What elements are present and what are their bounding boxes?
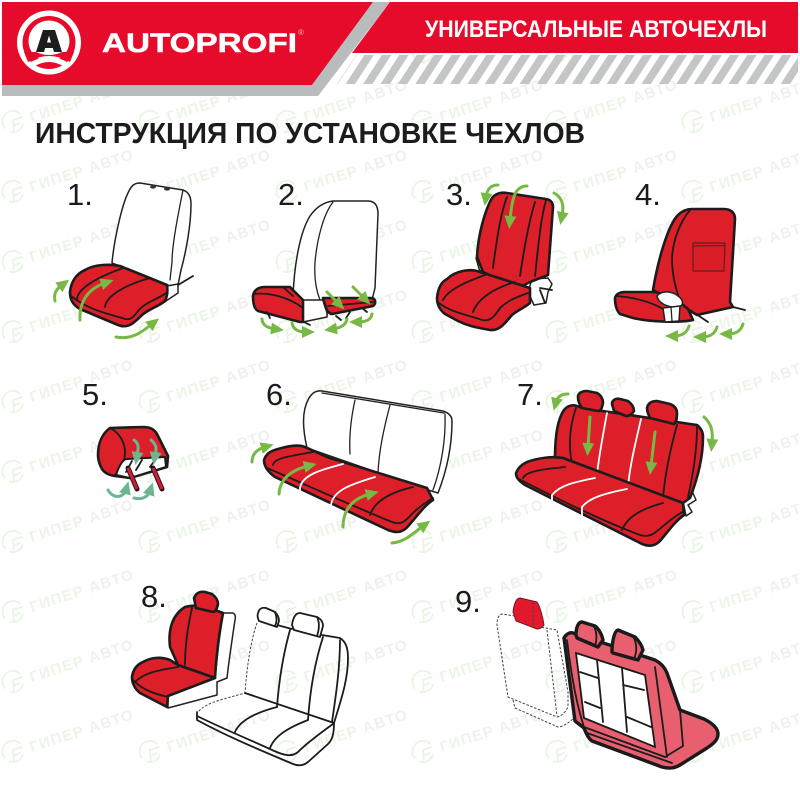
background watermarks: ГИПЕР АВТО [165, 6, 273, 56]
headrest opening [116, 457, 166, 478]
background watermarks: ГИПЕР АВТО [165, 356, 273, 406]
registered mark: ® [298, 28, 304, 37]
headrest [98, 427, 168, 478]
red front strip [323, 298, 375, 314]
white cushion stitching [552, 478, 595, 503]
step 6 [252, 377, 452, 543]
step number 8: 8. [141, 579, 167, 614]
step number 9: 9. [455, 584, 481, 619]
pink seat frame [564, 633, 718, 768]
step number 5: 5. [82, 377, 108, 412]
background watermarks: ГИПЕР АВТО [572, 216, 680, 266]
background watermarks: ГИПЕР АВТО [28, 566, 136, 616]
background watermarks: ГИПЕР АВТО [438, 706, 546, 756]
background watermarks: ГИПЕР АВТО [572, 426, 680, 476]
headrests [578, 391, 677, 424]
background watermarks: ГИПЕР АВТО [302, 566, 410, 616]
solid bench [197, 693, 334, 765]
centre headrest [612, 399, 634, 416]
arrows step 7 [588, 417, 590, 447]
step 5 [82, 377, 168, 499]
background watermarks: ГИПЕР АВТО [438, 216, 546, 266]
background watermarks: ГИПЕР АВТО [438, 76, 546, 126]
logo emblem [17, 10, 81, 74]
background watermarks: ГИПЕР АВТО [28, 356, 136, 406]
seat back pocket [693, 243, 725, 271]
step 9 [455, 584, 718, 768]
header banner [2, 2, 798, 96]
background watermarks: ГИПЕР АВТО [438, 636, 546, 686]
white brackets [657, 292, 682, 307]
bench right headrest [292, 613, 323, 637]
step number 2: 2. [278, 177, 304, 212]
step 7 [516, 377, 712, 546]
right headrest [647, 401, 677, 424]
background watermarks: ГИПЕР АВТО [165, 496, 273, 546]
left headrest [578, 391, 603, 411]
white side brackets [528, 278, 552, 305]
header tagline: УНИВЕРСАЛЬНЫЕ АВТОЧЕХЛЫ [425, 16, 767, 43]
background watermarks: ГИПЕР АВТО [28, 76, 136, 126]
background watermarks: ГИПЕР АВТО [165, 426, 273, 476]
headrest rods [128, 468, 137, 489]
background watermarks: ГИПЕР АВТО [572, 566, 680, 616]
background watermarks: ГИПЕР АВТО [572, 286, 680, 336]
background watermarks: ГИПЕР АВТО [28, 496, 136, 546]
background watermarks: ГИПЕР АВТО [438, 356, 546, 406]
header stripes [337, 55, 798, 84]
background watermarks: ГИПЕР АВТО [302, 496, 410, 546]
step number 3: 3. [446, 177, 472, 212]
background watermarks: ГИПЕР АВТО [302, 146, 410, 196]
white back stitching [597, 413, 607, 475]
red headrest [513, 598, 544, 629]
background watermarks: ГИПЕР АВТО [165, 286, 273, 336]
background watermarks: ГИПЕР АВТО [165, 706, 273, 756]
background watermarks: ГИПЕР АВТО [572, 706, 680, 756]
background watermarks: ГИПЕР АВТО [165, 216, 273, 266]
background watermarks: ГИПЕР АВТО [438, 496, 546, 546]
red seat cushion [615, 292, 693, 322]
background watermarks: ГИПЕР АВТО [302, 76, 410, 126]
bench left headrest [258, 608, 279, 627]
white bench back [304, 391, 452, 493]
background watermarks: ГИПЕР АВТО [165, 636, 273, 686]
background watermarks: ГИПЕР АВТО [28, 706, 136, 756]
seat back white [293, 201, 378, 302]
background watermarks: ГИПЕР АВТО [302, 706, 410, 756]
background watermarks: ГИПЕР АВТО [572, 76, 680, 126]
background watermarks: ГИПЕР АВТО [165, 566, 273, 616]
headrest [194, 592, 218, 612]
arrows step 1 [55, 285, 62, 301]
red seat back rear view [653, 209, 735, 315]
background watermarks: ГИПЕР АВТО [302, 356, 410, 406]
white bench outline [197, 608, 348, 765]
background watermarks: ГИПЕР АВТО [302, 216, 410, 266]
background watermarks: ГИПЕР АВТО [572, 356, 680, 406]
seat back white [112, 183, 191, 286]
step number 4: 4. [635, 177, 661, 212]
arrows step 6 [252, 447, 265, 462]
background watermarks: ГИПЕР АВТО [572, 6, 680, 56]
red seat cushion [70, 265, 167, 326]
bench cushion seams [235, 707, 277, 732]
background watermarks: ГИПЕР АВТО [438, 286, 546, 336]
background watermarks: ГИПЕР АВТО [28, 216, 136, 266]
background watermarks: ГИПЕР АВТО [302, 6, 410, 56]
pink left headrest [576, 622, 603, 647]
background watermarks: ГИПЕР АВТО [165, 76, 273, 126]
pink right headrest [612, 630, 643, 660]
seat back window [576, 653, 655, 747]
white stitching [300, 464, 343, 491]
dashed seat outline [497, 614, 575, 727]
background watermarks: ГИПЕР АВТО [28, 286, 136, 336]
pink frame seams [567, 640, 683, 757]
background watermarks: ГИПЕР АВТО [28, 146, 136, 196]
background watermarks: ГИПЕР АВТО [572, 636, 680, 686]
red seat back [477, 193, 553, 288]
red bench cushion [264, 446, 433, 532]
dashed left edge [198, 623, 257, 712]
red seat back half [170, 606, 223, 678]
header red panel right [352, 2, 798, 53]
background watermarks: ГИПЕР АВТО [572, 496, 680, 546]
seat straps [690, 307, 745, 322]
background watermarks: ГИПЕР АВТО [438, 146, 546, 196]
arrows step 3 [486, 185, 498, 197]
background watermarks: ГИПЕР АВТО [28, 636, 136, 686]
arrows step 5 [134, 440, 138, 456]
window seams [580, 660, 651, 732]
bench back seams [277, 630, 290, 707]
step number 7: 7. [517, 377, 543, 412]
background watermarks: ГИПЕР АВТО [28, 426, 136, 476]
step 3 [437, 177, 563, 330]
step 1 [55, 177, 193, 338]
red cushion half [132, 658, 215, 707]
red bench back [555, 405, 703, 503]
background watermarks: ГИПЕР АВТО [28, 6, 136, 56]
header grey band [2, 2, 390, 96]
background watermarks: ГИПЕР АВТО [438, 566, 546, 616]
arrows step 2 [262, 319, 275, 329]
white side brackets [554, 450, 563, 460]
title: ИНСТРУКЦИЯ ПО УСТАНОВКЕ ЧЕХЛОВ [35, 118, 585, 150]
step 2 [253, 177, 378, 332]
arrows step 4 [674, 326, 689, 336]
background watermarks: ГИПЕР АВТО [438, 6, 546, 56]
red lifted cushion [253, 287, 303, 322]
step 8 [132, 579, 348, 765]
logo wordmark: AUTOPROFI [102, 28, 297, 58]
white side panel [168, 613, 235, 708]
step number 1: 1. [67, 177, 93, 212]
step number 6: 6. [266, 377, 292, 412]
seat straps [267, 308, 367, 325]
step 4 [615, 177, 745, 337]
background watermarks: ГИПЕР АВТО [572, 146, 680, 196]
background watermarks: ГИПЕР АВТО [165, 146, 273, 196]
red bench cushion [516, 457, 684, 546]
red seat cushion [437, 270, 530, 330]
header red panel left [2, 2, 373, 85]
background watermarks: ГИПЕР АВТО [302, 636, 410, 686]
background watermarks: ГИПЕР АВТО [302, 286, 410, 336]
background watermarks: ГИПЕР АВТО [438, 426, 546, 476]
background watermarks: ГИПЕР АВТО [302, 426, 410, 476]
